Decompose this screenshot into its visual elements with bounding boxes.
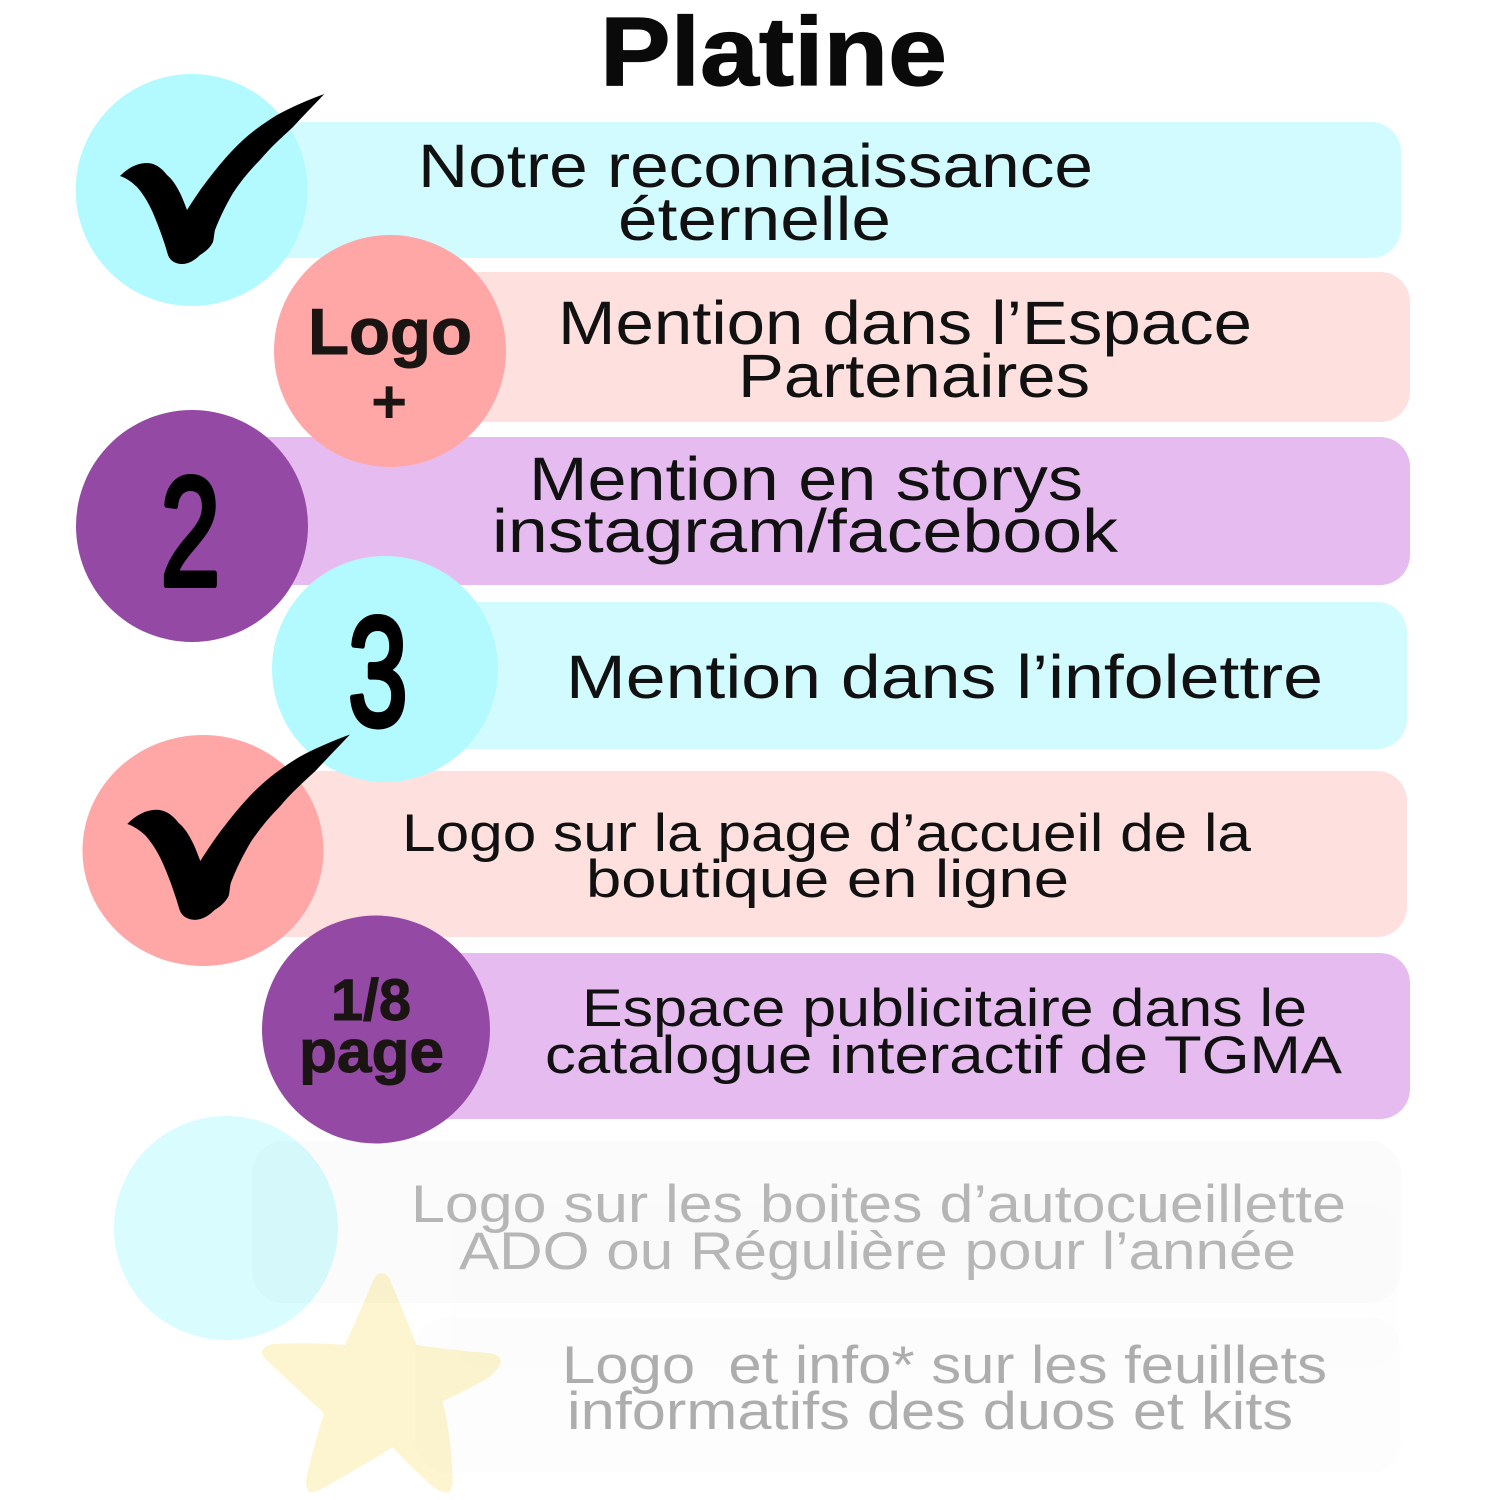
- text: autocueillette: Logo sur les boites d’autocueillette: [411, 1175, 1346, 1234]
- text: storys: Mention en storys: [529, 445, 1083, 513]
- faded band: feuillets: [415, 1317, 1401, 1473]
- circle: second check: [82, 735, 324, 966]
- badge: logo plus: +: [371, 368, 407, 437]
- band: catalogue: [376, 953, 1410, 1119]
- badge: number 3: 3: [348, 586, 408, 759]
- badge: logo plus: Logo: [308, 295, 472, 368]
- badge: one eighth page: page: [299, 1018, 444, 1085]
- band: reconnaissance: [250, 122, 1401, 258]
- faded circle: autocueillette: [114, 1116, 338, 1340]
- text: espace partenaires: Partenaires: [738, 342, 1090, 410]
- text: boutique en ligne: Logo sur la page d’accueil de la: [402, 804, 1252, 863]
- band: infolettre: [385, 602, 1407, 749]
- text: feuillets: Logo et info* sur les feuillets: [562, 1336, 1327, 1395]
- text: boutique en ligne: [402, 804, 1252, 909]
- band: espace partenaires: [400, 272, 1410, 422]
- text: reconnaissance: Notre reconnaissance: [418, 132, 1093, 200]
- band: boutique en ligne: [200, 771, 1407, 937]
- badge: number 3: [272, 556, 498, 782]
- text: storys: instagram/facebook: [492, 497, 1119, 565]
- text: autocueillette: [411, 1175, 1346, 1281]
- text: feuillets: informatifs des duos et kits: [567, 1382, 1293, 1441]
- icon: first checkmark: [120, 94, 324, 264]
- badge: one eighth page: 1/8: [331, 968, 411, 1033]
- text: espace partenaires: [558, 289, 1252, 410]
- text: feuillets: [562, 1336, 1327, 1441]
- icon: second checkmark: [127, 735, 350, 920]
- text: catalogue: catalogue interactif de TGMA: [545, 1026, 1343, 1085]
- faded band: overlap: [451, 1203, 1399, 1368]
- badge: number 2: [76, 410, 308, 642]
- band: storys: [200, 437, 1410, 585]
- badge: number 2: 2: [160, 446, 220, 619]
- text: catalogue: [545, 979, 1343, 1085]
- text: storys: [492, 445, 1119, 565]
- title: Platine: [600, 0, 947, 106]
- text: boutique en ligne: boutique en ligne: [586, 850, 1069, 909]
- faded star: [262, 1273, 501, 1493]
- faded band: autocueillette: [252, 1141, 1401, 1303]
- badge: one eighth page: [262, 916, 490, 1144]
- text: autocueillette: ADO ou Régulière pour l’année: [459, 1222, 1296, 1281]
- text: catalogue: Espace publicitaire dans le: [582, 979, 1307, 1038]
- circle: first check: [76, 74, 308, 306]
- badge: logo plus: [274, 235, 506, 467]
- text: reconnaissance: éternelle: [618, 185, 891, 253]
- text: reconnaissance: [418, 132, 1093, 253]
- text: infolettre: Mention dans l’infolettre: [566, 643, 1323, 711]
- text: espace partenaires: Mention dans l’Espace: [558, 289, 1252, 357]
